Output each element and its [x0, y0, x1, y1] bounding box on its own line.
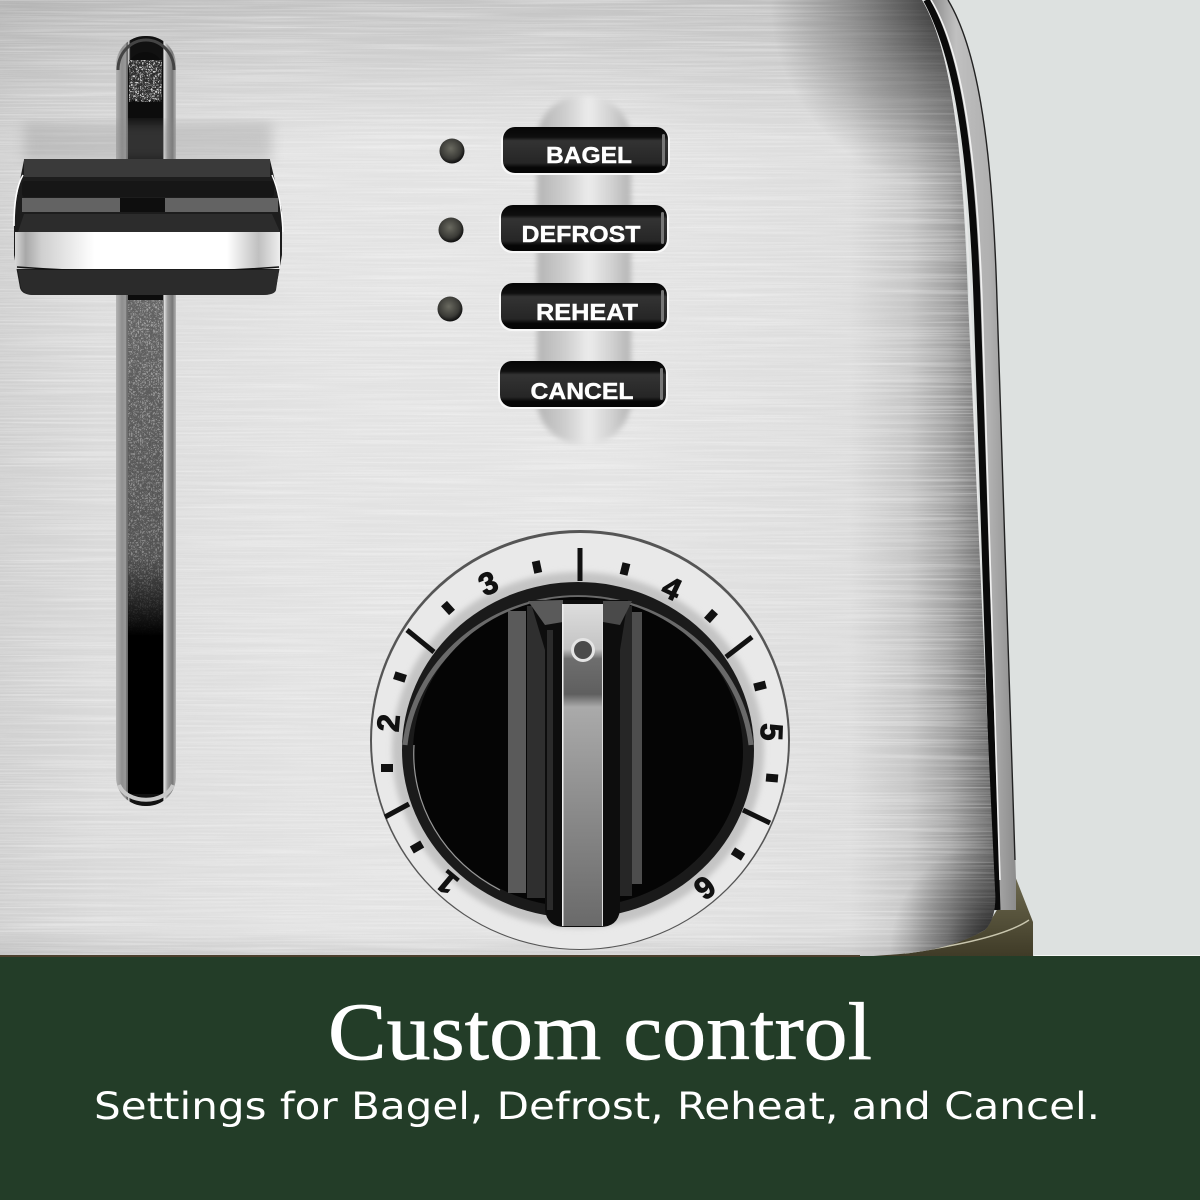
dial numbers: 1	[429, 864, 465, 902]
dial numbers: 2	[370, 713, 407, 733]
button: cancel	[498, 361, 668, 409]
dial numbers: 4	[657, 569, 688, 608]
dial numbers	[370, 564, 789, 907]
lever	[14, 159, 283, 295]
front panel	[0, 0, 1000, 960]
slot and lever	[14, 36, 283, 806]
dial numbers: 5	[754, 723, 789, 741]
lever shadow	[24, 122, 272, 162]
LED: defrost	[438, 218, 464, 242]
button: defrost: DEFROST	[522, 221, 640, 247]
subtitle: Settings for Bagel, Defrost, Reheat, and Cancel.	[94, 1085, 1100, 1128]
title: Custom control	[328, 986, 872, 1077]
dial ring	[370, 530, 790, 950]
button recess	[537, 96, 631, 444]
button cluster	[438, 96, 670, 444]
knob	[402, 582, 754, 927]
button: reheat	[499, 283, 669, 331]
timer dial	[370, 530, 790, 950]
button: defrost	[499, 205, 669, 253]
toaster body	[0, 0, 1033, 960]
side rim	[930, 0, 1016, 910]
button: cancel: CANCEL	[530, 378, 634, 404]
LED: reheat	[438, 296, 462, 322]
dial numbers: 6	[687, 869, 722, 907]
base trim	[860, 876, 1033, 958]
button: bagel	[501, 127, 670, 175]
knob reflections	[508, 611, 526, 893]
handle indicator dot	[571, 638, 595, 662]
dial numbers: 3	[473, 564, 503, 603]
slot bezel	[116, 36, 176, 806]
major ticks	[385, 548, 770, 823]
background	[0, 0, 1200, 960]
LED: bagel	[440, 138, 464, 164]
caption band	[0, 955, 1200, 1200]
button: bagel: BAGEL	[546, 142, 632, 168]
minor ticks	[381, 560, 778, 861]
dark seam	[926, 0, 997, 910]
button: reheat: REHEAT	[536, 299, 638, 325]
handle	[530, 600, 628, 927]
